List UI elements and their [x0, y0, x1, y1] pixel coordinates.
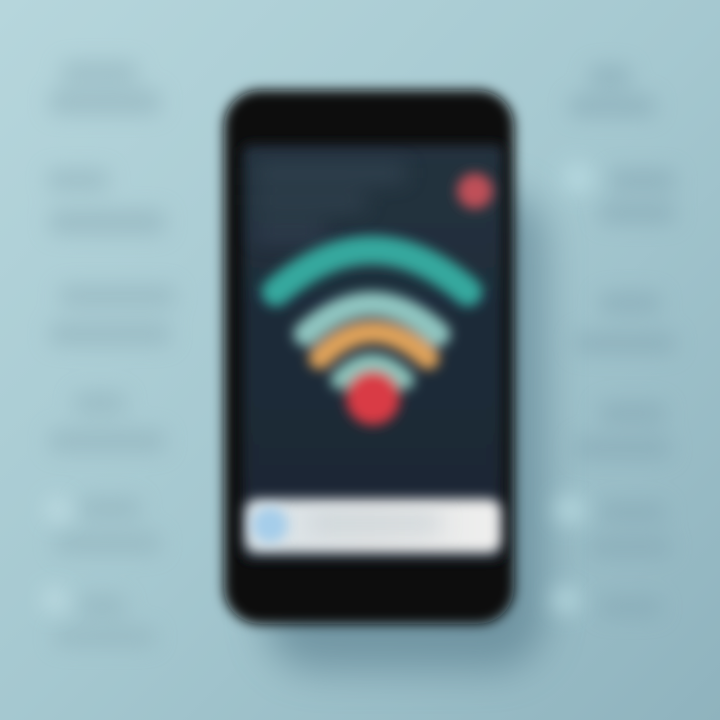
right item 5	[590, 503, 670, 556]
wifi dot	[346, 371, 400, 425]
right column of faint feature items	[570, 66, 675, 616]
left item 5	[55, 498, 160, 553]
wifi icon	[276, 250, 468, 425]
bottom search bar	[245, 499, 501, 553]
phone body	[224, 90, 514, 624]
left item 4	[50, 393, 165, 452]
notification badge	[457, 173, 493, 209]
phone	[224, 90, 514, 624]
bar text	[310, 512, 440, 534]
wifi arc second	[306, 304, 438, 334]
left item 3	[50, 286, 175, 345]
left item 6	[55, 596, 155, 646]
bar blue icon	[252, 507, 288, 543]
phone shadow	[265, 190, 545, 670]
wifi arc third	[320, 332, 428, 358]
right light dots	[552, 162, 594, 614]
left light dots	[42, 497, 71, 613]
screen header text	[255, 165, 405, 239]
left column of faint feature items	[48, 62, 175, 646]
right item 4	[575, 403, 670, 458]
phone screen	[243, 145, 503, 560]
wifi arc fourth	[340, 363, 405, 380]
right item 1	[570, 66, 655, 116]
right item 3	[575, 293, 675, 353]
left item 1	[50, 62, 160, 114]
right item 2	[600, 170, 675, 223]
left item 2	[48, 170, 165, 234]
right item 6	[600, 598, 660, 616]
wifi arc outer	[276, 250, 468, 292]
